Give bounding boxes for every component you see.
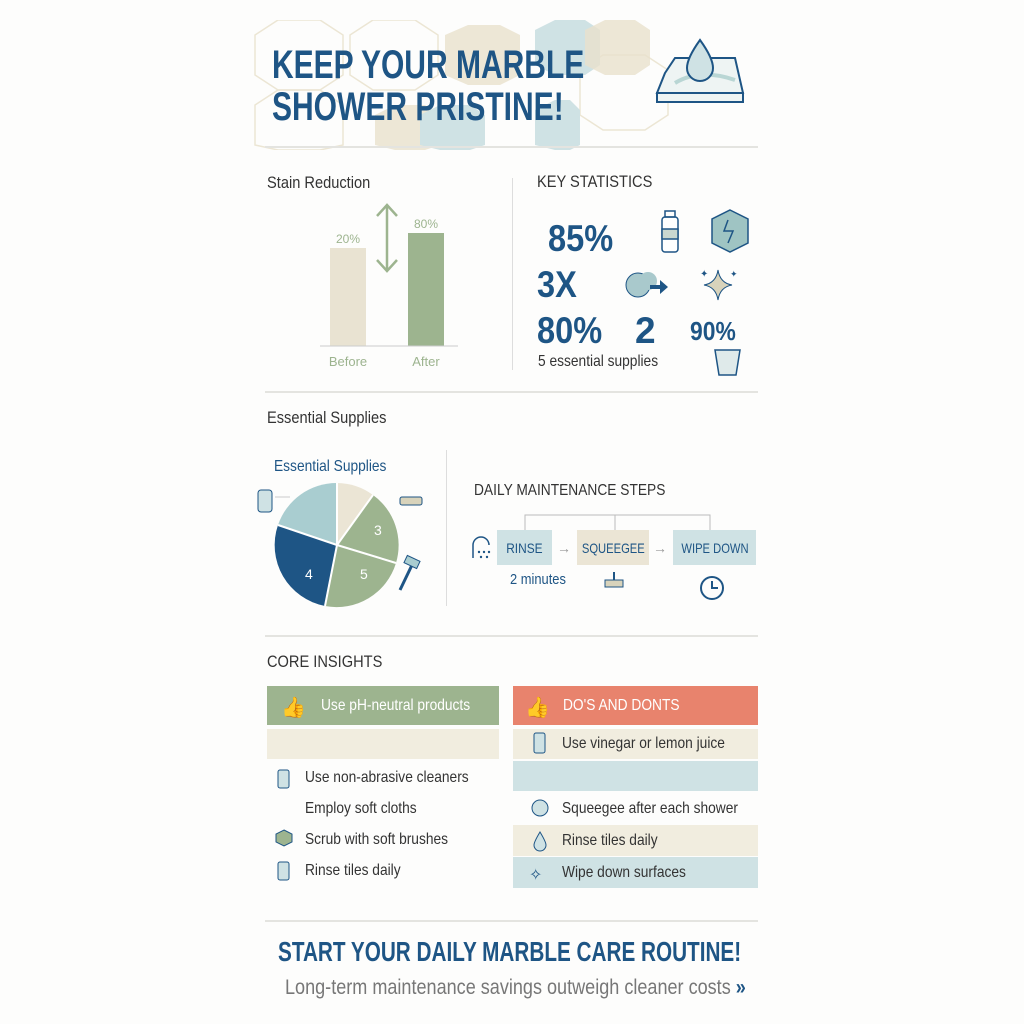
flow: daily steps: → [557,540,571,556]
pie chart: essential supplies [258,458,422,608]
flow: daily steps: RINSE [506,540,543,556]
pie chart: essential supplies: Essential Supplies [274,458,386,475]
flow: daily steps: WIPE DOWN [681,540,748,556]
panel: do's and don'ts: ✧ [529,867,542,884]
panel: do's and don'ts: Squeegee after each shower [562,800,738,817]
flow: daily steps: → [653,540,667,556]
bar chart: before/after: 80% [414,217,438,231]
header hexagon background [254,20,669,150]
flow: daily steps: SQUEEGEE [582,540,644,556]
key statistics numbers: 85% [548,218,613,259]
flow: daily steps: 2 minutes [510,571,566,588]
flow: daily steps [472,514,756,600]
key statistics numbers [537,218,736,370]
panel: do's and don'ts: Wipe down surfaces [562,864,686,880]
bar chart: before/after: Before [329,354,367,369]
panel: do's and don'ts [513,686,758,888]
pie chart: essential supplies: 5 [360,566,368,582]
call to action: START YOUR DAILY MARBLE CARE ROUTINE! [278,936,741,967]
key statistics numbers: 5 essential supplies [538,353,658,370]
key statistics numbers: 90% [690,316,736,346]
panel: insights left [267,686,499,880]
panel: do's and don'ts: 👍 [525,697,550,719]
heading: core insights: CORE INSIGHTS [267,652,382,671]
panel: insights left: Employ soft cloths [305,800,417,817]
panel: do's and don'ts: Rinse tiles daily [562,832,658,848]
title: KEEP YOUR MARBLE [272,43,584,87]
panel: insights left: Use pH-neutral products [321,696,470,714]
heading: daily maintenance steps: DAILY MAINTENANCE STEPS [474,482,665,499]
heading: stain reduction: Stain Reduction [267,173,370,192]
bar chart: before/after: After [412,354,440,369]
title [272,43,584,129]
key statistics numbers: 80% [537,310,602,351]
panel: insights left: Rinse tiles daily [305,862,401,879]
subtitle: Long-term maintenance savings outweigh cleaner costs » [285,976,746,999]
icon: marble slab with drop [656,38,744,103]
panel: insights left: 👍 [281,697,306,719]
icons: statistics [626,209,749,376]
icons: statistics: ✦ [700,269,708,280]
key statistics numbers: 3X [537,264,577,305]
key statistics numbers: 2 [635,310,656,351]
pie chart: essential supplies: 4 [305,566,313,582]
bar chart: before/after [320,203,458,369]
heading: essential supplies: Essential Supplies [267,408,386,427]
pie chart: essential supplies: 3 [374,522,382,538]
panel: do's and don'ts: Use vinegar or lemon juice [562,735,725,752]
heading: key statistics: KEY STATISTICS [537,172,652,191]
panel: do's and don'ts: DO'S AND DONTS [563,696,680,714]
panel: insights left: Scrub with soft brushes [305,831,448,848]
bar chart: before/after: 20% [336,232,360,246]
icons: statistics: ✦ [730,269,738,279]
panel: insights left: Use non-abrasive cleaners [305,769,469,786]
title: SHOWER PRISTINE! [272,85,564,129]
